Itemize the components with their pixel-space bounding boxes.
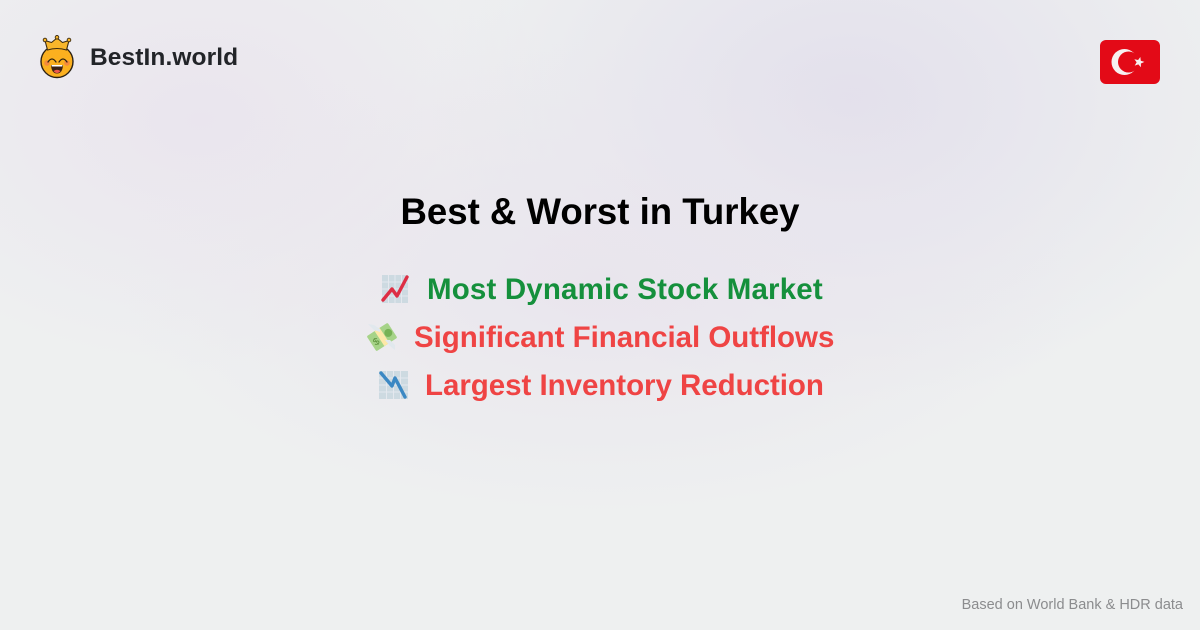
list row: financial outflows — [367, 321, 834, 354]
title: Best & Worst in Turkey — [400, 190, 800, 232]
label: financial outflows: Significant Financial Outflows — [414, 321, 834, 354]
icon: rising chart — [381, 275, 409, 303]
source note: Based on World Bank & HDR data — [962, 597, 1183, 613]
label: stock market: Most Dynamic Stock Market — [427, 273, 823, 306]
logo wordmark: BestIn.world — [90, 44, 238, 71]
icon: money with wings: $ — [371, 336, 382, 348]
icon: Turkey flag — [1100, 40, 1160, 84]
label: inventory reduction: Largest Inventory Reduction — [425, 369, 824, 402]
icon: money with wings — [367, 323, 397, 351]
list row: stock market — [381, 273, 823, 306]
icon: falling chart — [379, 371, 408, 399]
list row: inventory reduction — [379, 369, 824, 402]
logo: crown smiley icon — [40, 35, 74, 78]
